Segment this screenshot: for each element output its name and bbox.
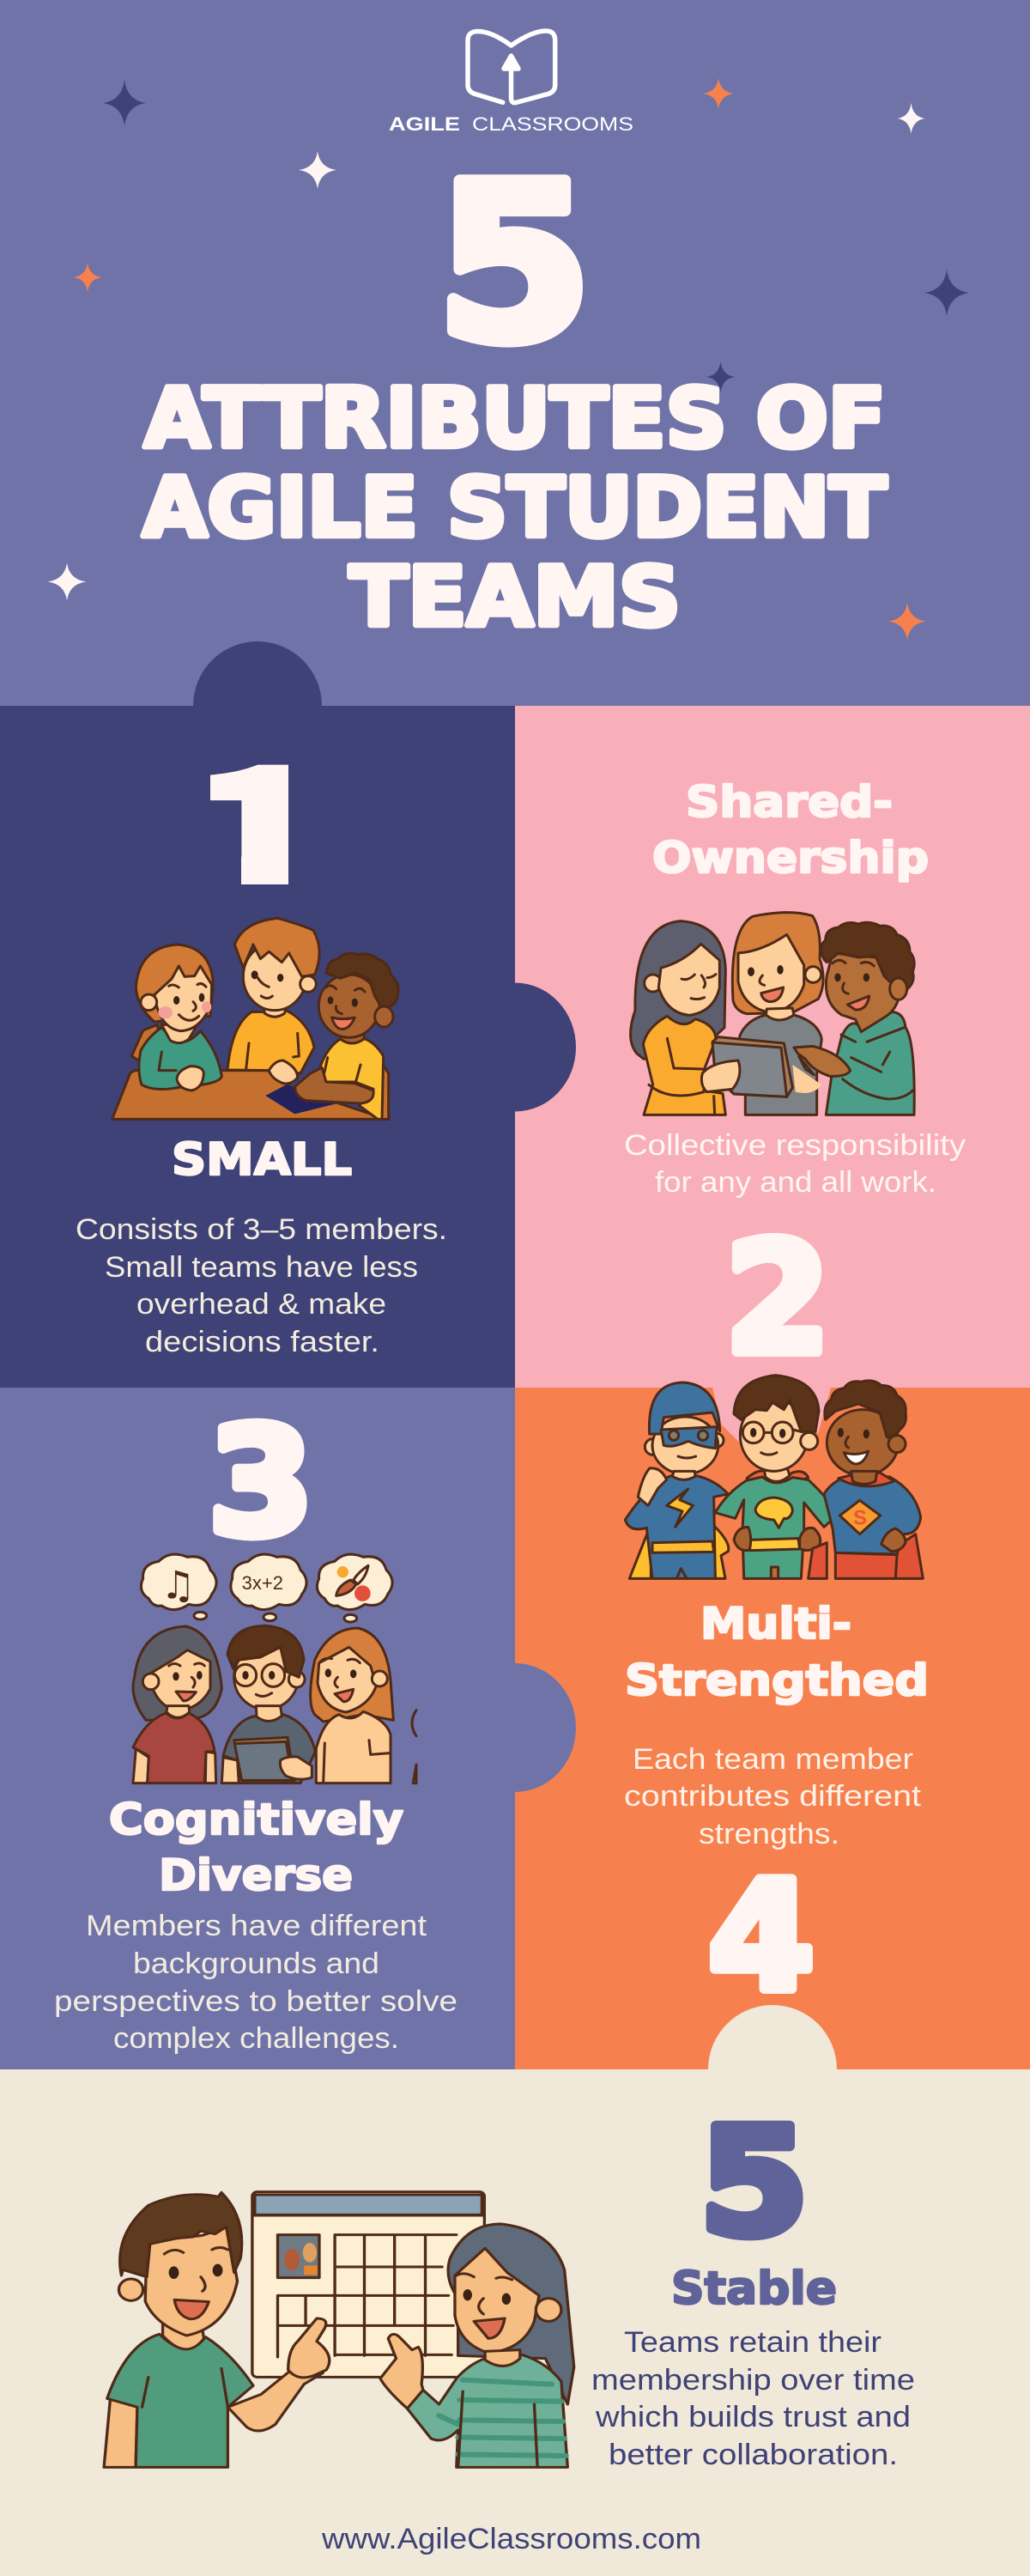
tablet xyxy=(712,1037,821,1097)
hero: red cape: S xyxy=(853,1506,867,1529)
hero: blue mask xyxy=(625,1382,729,1578)
body text: stable: better collaboration. xyxy=(609,2439,898,2471)
heading: Multi-Strengthed: Strengthed xyxy=(625,1656,929,1705)
body text: multi-strengthed: Each team member xyxy=(633,1743,913,1776)
heading: Stable: Stable xyxy=(671,2263,837,2315)
hero: green suit with glasses xyxy=(715,1376,838,1578)
heading: Cognitively Diverse: Cognitively xyxy=(109,1795,403,1844)
calendar xyxy=(252,2192,484,2377)
body text: cognitively diverse xyxy=(54,1910,457,2055)
thought bubble: math xyxy=(231,1554,306,1621)
heading: Shared-Ownership: Ownership xyxy=(652,833,929,883)
body text: small: Small teams have less xyxy=(105,1251,418,1284)
body text: multi-strengthed xyxy=(624,1743,922,1850)
illustration: three students around a tablet xyxy=(631,913,914,1115)
number 5: 5 xyxy=(700,2096,809,2269)
pink backdrop between heads xyxy=(712,1387,831,1444)
panel: 5 stable xyxy=(0,2005,1030,2576)
student: girl in red shirt xyxy=(133,1626,221,1783)
big number 5: 5 xyxy=(436,138,592,390)
body text: stable: which builds trust and xyxy=(595,2401,911,2433)
student: boy in yellow xyxy=(265,953,398,1119)
body text: small: Consists of 3–5 members. xyxy=(76,1213,447,1246)
title: ATTRIBUTES OF xyxy=(144,372,886,466)
body text: small: overhead & make xyxy=(136,1288,386,1321)
body text: stable: Teams retain their xyxy=(624,2326,882,2359)
panel: 3 cognitively diverse xyxy=(0,1388,576,2069)
illustration: two students pointing at a calendar xyxy=(104,2192,574,2467)
illustration: three students with thought bubbles xyxy=(133,1554,416,1783)
body text: small xyxy=(76,1213,447,1358)
decorative stars xyxy=(48,78,969,641)
logo wordmark: CLASSROOMS xyxy=(472,113,633,135)
thought bubble: math: 3x+2 xyxy=(242,1572,283,1594)
logo wordmark: AGILE xyxy=(389,113,460,135)
logo: Agile Classrooms xyxy=(389,31,633,135)
puzzle tab right xyxy=(454,1663,576,1792)
cropped neighbour fragments xyxy=(412,1710,416,1783)
number 1: 1 xyxy=(191,705,337,926)
body text: cognitively diverse: complex challenges. xyxy=(113,2022,399,2055)
heading: Cognitively Diverse xyxy=(109,1795,403,1900)
body text: shared-ownership: Collective responsibility xyxy=(624,1129,966,1162)
body text: cognitively diverse: perspectives to better solve xyxy=(54,1985,457,2018)
student: boy with green hoodie xyxy=(821,922,914,1115)
heading: SMALL: SMALL xyxy=(172,1134,352,1186)
heading: Shared-Ownership: Shared- xyxy=(686,777,893,827)
student: girl with orange hair xyxy=(311,1628,393,1783)
number 3: 3 xyxy=(208,1395,314,1569)
student: boy with glasses and tablet xyxy=(221,1625,315,1783)
puzzle tab right xyxy=(454,982,576,1111)
body text: small: decisions faster. xyxy=(145,1326,379,1358)
thought bubble: music xyxy=(141,1554,216,1619)
puzzle tab top xyxy=(708,2005,837,2134)
puzzle tab top xyxy=(193,641,322,770)
table xyxy=(112,1062,389,1119)
hero: red cape xyxy=(809,1381,923,1578)
thought bubble: paintbrush xyxy=(317,1554,392,1622)
student: boy in orange xyxy=(227,918,319,1084)
number 2: 2 xyxy=(724,1210,831,1388)
illustration: three students as superheroes xyxy=(625,1376,923,1578)
illustration: three students at a table xyxy=(112,918,398,1119)
footer url: www.AgileClassrooms.com xyxy=(321,2523,701,2555)
body text: cognitively diverse: backgrounds and xyxy=(133,1947,379,1980)
body text: shared-ownership: for any and all work. xyxy=(655,1166,936,1199)
title: AGILE STUDENT xyxy=(142,461,887,556)
student: girl in striped sweater xyxy=(380,2224,574,2467)
panel: 4 multi-strengthed xyxy=(515,1376,1030,2069)
panel: 1 small xyxy=(0,641,576,1388)
student: boy in green shirt xyxy=(104,2192,330,2467)
panel: 2 shared-ownership xyxy=(515,706,1030,1388)
body text: cognitively diverse: Members have different xyxy=(86,1910,427,1942)
heading: Shared-Ownership xyxy=(652,777,929,883)
body text: multi-strengthed: strengths. xyxy=(699,1818,839,1850)
heading: Multi-Strengthed xyxy=(625,1599,929,1705)
student: girl with orange hair xyxy=(732,913,823,1115)
number 4: 4 xyxy=(708,1850,815,2025)
body text: shared-ownership xyxy=(624,1129,966,1199)
heading: Cognitively Diverse: Diverse xyxy=(159,1850,353,1900)
title xyxy=(142,372,887,645)
body text: multi-strengthed: contributes different xyxy=(624,1780,922,1813)
title: TEAMS xyxy=(349,550,681,645)
hands xyxy=(701,1046,851,1092)
body text: stable: membership over time xyxy=(591,2364,915,2397)
thought bubble: music: ♫ xyxy=(161,1563,196,1608)
student: girl with dark hair xyxy=(631,921,725,1115)
icon: open book with arrow xyxy=(468,31,555,103)
student: girl in teal xyxy=(131,945,221,1091)
body text: stable xyxy=(591,2326,915,2471)
panel: hero header xyxy=(0,0,1030,706)
heading: Multi-Strengthed: Multi- xyxy=(700,1599,851,1649)
